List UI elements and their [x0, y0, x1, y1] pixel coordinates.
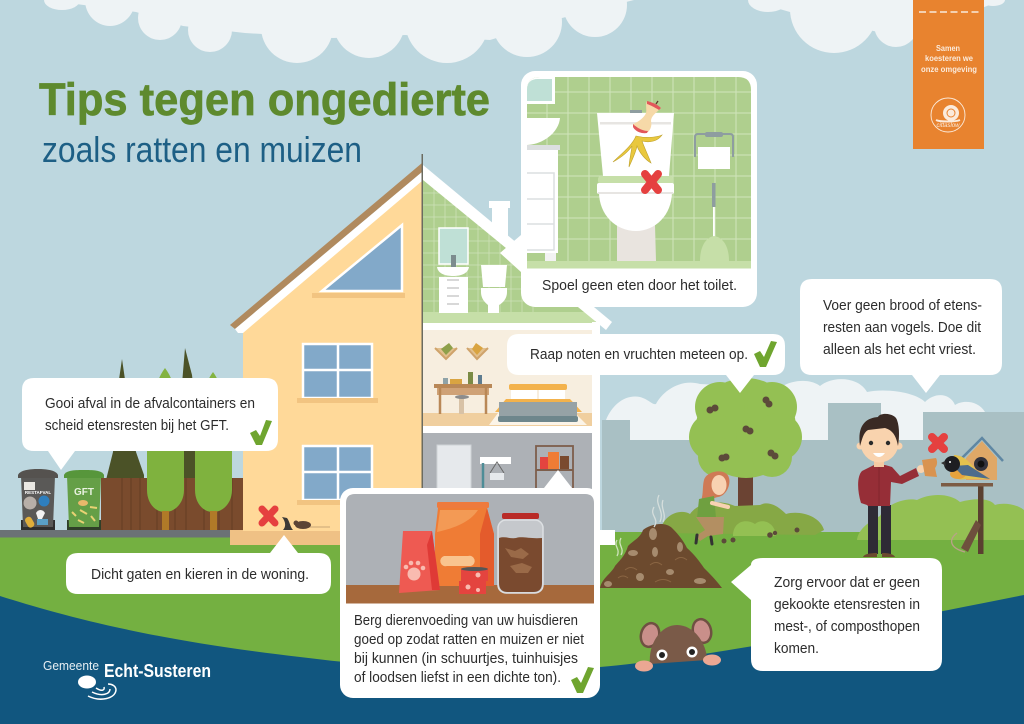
callout: pet food panel: of loodsen liefst in een dichte ton).: [354, 670, 561, 686]
trees behind the fence: [106, 348, 232, 512]
background skyline and clouds: [602, 379, 1024, 540]
bird: [941, 455, 990, 480]
pet food tins: [459, 567, 488, 594]
bathroom illustration: [527, 77, 751, 268]
municipality logo: [43, 658, 211, 699]
callout: nuts and fruit: [507, 334, 785, 393]
icon: red cross above the bread: [932, 437, 944, 449]
icon: green check: [754, 341, 777, 367]
waste container: GFT: [64, 470, 104, 530]
rat climbing the post: [952, 520, 981, 552]
toilet paper holder: [695, 132, 733, 169]
callout: nuts and fruit: Raap noten en vruchten meteen op.: [530, 347, 748, 363]
compost heap: [600, 495, 722, 588]
bushes near the tree: [660, 502, 824, 536]
mouse at the wall: [282, 517, 330, 530]
callout: birds: [800, 279, 1002, 393]
callout: compost: [731, 558, 942, 671]
pet food illustration: [346, 494, 594, 604]
callout: waste containers: scheid etensresten bij het GFT.: [45, 418, 229, 434]
red bag: [399, 531, 440, 593]
bird house on a post: [941, 438, 1003, 554]
callout: compost: mest-, of composthopen: [774, 619, 920, 635]
slice of bread: [922, 458, 937, 477]
icon: red cross on the toilet: [645, 174, 658, 190]
attic window: [312, 225, 405, 298]
lower window: [297, 446, 378, 505]
orange tag with slogan: koesteren we: [925, 53, 973, 63]
callout: holes and cracks: Dicht gaten en kieren in de woning.: [91, 567, 309, 583]
callout: bathroom panel: [500, 71, 757, 307]
callout: birds: resten aan vogels. Doe dit: [823, 320, 981, 336]
callout: compost: gekookte etensresten in: [774, 597, 920, 613]
bushes on the right: [857, 495, 1024, 540]
glass jar: [498, 513, 543, 593]
municipality logo: Gemeente: [43, 658, 99, 673]
icon: red cross at the hole in the wall: [262, 509, 275, 523]
path and pavement: [0, 530, 342, 545]
ground: grass: [0, 532, 1024, 724]
house: left exterior: [230, 163, 422, 531]
house: chimney: [489, 201, 510, 244]
wooden fence: [101, 478, 244, 531]
cittaslow snail logo: cittaslow: [936, 123, 960, 129]
girl collecting nuts: [696, 471, 729, 544]
callout: compost: Zorg ervoor dat er geen: [774, 575, 920, 591]
callout: pet food panel: [340, 470, 600, 698]
apple core: [633, 101, 661, 133]
house: centre dividing line: [422, 154, 423, 494]
waste container: GFT: GFT: [74, 487, 94, 498]
mouse peeking over the edge: [635, 617, 721, 672]
toilet: [597, 110, 674, 261]
poplar trees: [147, 451, 232, 531]
orange tag with slogan: Samen: [936, 43, 960, 53]
title: Tips tegen ongedierte: [39, 74, 490, 125]
icon: green check: [250, 420, 272, 445]
subtitle: zoals ratten en muizen: [42, 129, 362, 170]
house: storage room: [423, 426, 600, 503]
fallen nuts: [722, 528, 800, 544]
callout: pet food panel: goed op zodat ratten en muizen er niet: [354, 632, 584, 648]
icon: green check: [571, 667, 594, 693]
waste container: restafval: RESTAFVAL: [25, 490, 51, 495]
house: cut-away attic bathroom: [423, 165, 612, 330]
banana peel: [613, 135, 662, 167]
callout: holes and cracks: [66, 535, 331, 594]
house: bedroom: [423, 323, 600, 427]
orange tag with slogan: [913, 0, 984, 149]
waste container: restafval: [18, 469, 58, 530]
callout: pet food panel: Berg dierenvoeding van uw huisdieren: [354, 613, 578, 629]
blue bottom band: [0, 595, 1024, 724]
callout: waste containers: Gooi afval in de afvalcontainers en: [45, 396, 255, 412]
orange tag with slogan: onze omgeving: [921, 64, 977, 74]
callout: pet food panel: bij kunnen (in schuurtjes, tuinhuisjes: [354, 651, 578, 667]
cittaslow snail logo: [931, 98, 965, 132]
orange bag: [435, 502, 494, 586]
tree with nuts: [689, 378, 802, 523]
callout: birds: Voer geen brood of etens-: [823, 298, 982, 314]
callout: bathroom panel: Spoel geen eten door het toilet.: [542, 278, 737, 294]
callout: waste containers: [22, 378, 278, 470]
callout: birds: alleen als het echt vriest.: [823, 342, 976, 358]
house: right wall and ledge: [592, 322, 615, 547]
upper window: [297, 344, 378, 403]
clouds at the top: [44, 0, 1005, 63]
callout: compost: komen.: [774, 641, 819, 657]
toilet brush: [700, 183, 729, 261]
man feeding a bird: [856, 414, 925, 557]
municipality logo: Echt-Susteren: [104, 661, 211, 681]
